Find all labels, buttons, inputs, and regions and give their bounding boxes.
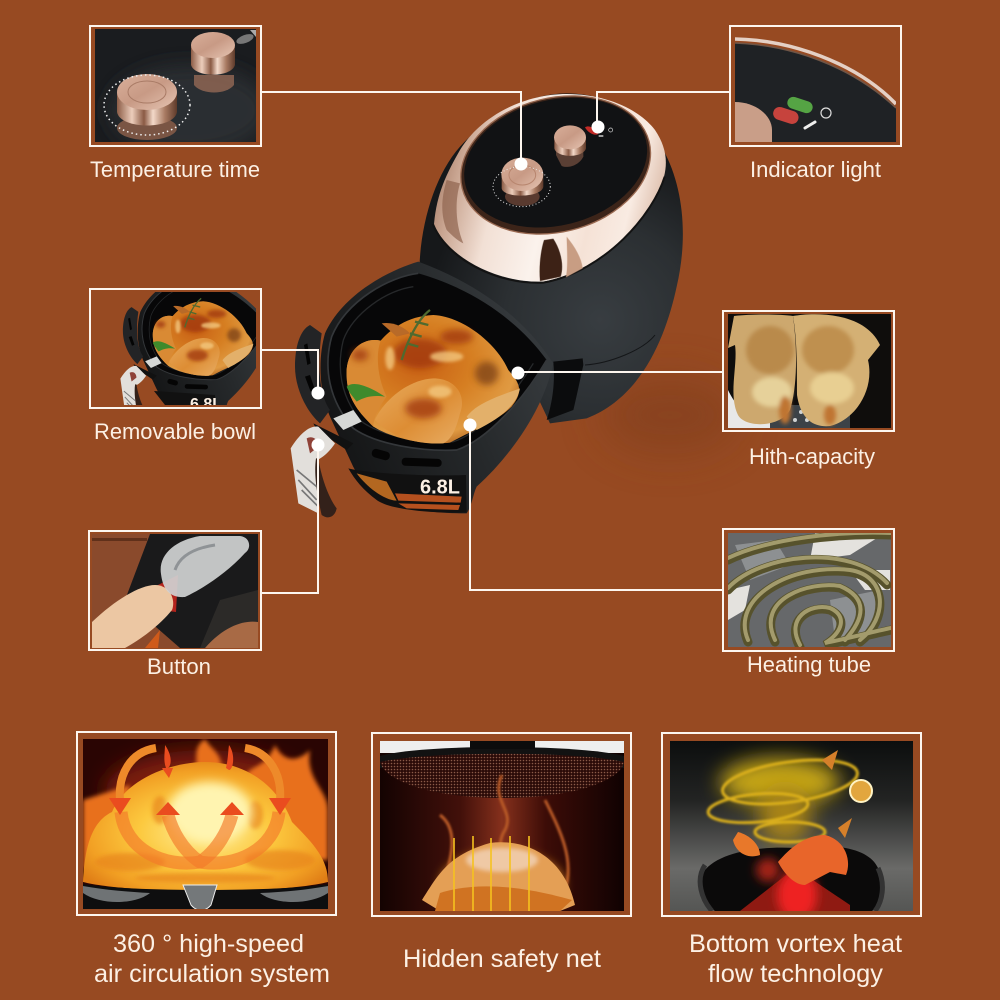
icon: thumb xyxy=(92,585,173,648)
arrows xyxy=(120,748,280,863)
body recess xyxy=(547,358,583,420)
label: 360 air circulation: 360 ° high-speed xyxy=(113,930,304,958)
icon: power symbol xyxy=(821,108,831,118)
label: high capacity: Hith-capacity xyxy=(749,444,875,469)
icon: transparent cover xyxy=(161,536,249,597)
small knob xyxy=(554,125,586,167)
panel: hidden safety net xyxy=(372,733,631,919)
indicator lights xyxy=(585,126,613,137)
label: bottom vortex heat: flow technology xyxy=(708,960,884,988)
lid black top panel xyxy=(446,77,665,253)
icon: glass handle xyxy=(183,885,217,910)
label: temperature time: Temperature time xyxy=(90,157,260,182)
label: removable bowl: Removable bowl xyxy=(94,419,256,444)
fryer body xyxy=(419,93,683,423)
chicken glow xyxy=(83,762,328,891)
connector lines xyxy=(262,92,729,593)
basket label 6.8L xyxy=(348,468,467,513)
chicken xyxy=(422,842,575,911)
panel: button xyxy=(89,531,261,650)
yellow vortex xyxy=(720,758,840,806)
right chicken xyxy=(793,314,880,426)
label: hidden safety net: Hidden safety net xyxy=(403,945,601,973)
basket label 6.8L: 6.8L xyxy=(420,476,460,499)
label: 360 air circulation: air circulation system xyxy=(94,960,330,988)
heating coil xyxy=(728,533,891,647)
mesh net xyxy=(380,754,624,798)
panel: 360 air circulation xyxy=(77,732,336,915)
panel: indicator light xyxy=(730,26,901,146)
panel: high capacity xyxy=(723,311,894,431)
pull-out basket with chicken xyxy=(291,262,553,517)
icon: food ball xyxy=(850,780,872,802)
label: button: Button xyxy=(147,654,211,679)
connector dots xyxy=(312,120,604,452)
lid rose gold ring xyxy=(433,77,666,283)
panel: removable bowl: 6.8L xyxy=(190,396,222,413)
label: bottom vortex heat: Bottom vortex heat xyxy=(689,930,902,958)
panel: heating tube xyxy=(723,529,894,651)
ring reflection xyxy=(442,180,583,281)
basket xyxy=(702,846,881,911)
icon: thermometer xyxy=(805,122,815,128)
flames xyxy=(83,739,328,870)
left chicken xyxy=(728,314,796,424)
large knob xyxy=(493,158,550,207)
main product: air fryer xyxy=(291,77,683,517)
floor shadow xyxy=(600,375,740,455)
icon: knob fragment xyxy=(735,102,772,142)
label: indicator light: Indicator light xyxy=(750,157,881,182)
red glow xyxy=(740,874,850,911)
icon: red light xyxy=(773,107,799,124)
panel: temperature time xyxy=(90,26,270,155)
flames xyxy=(440,775,568,890)
icon: large knob xyxy=(104,74,190,140)
icon: small knob xyxy=(191,32,235,92)
body seam xyxy=(585,335,655,365)
panel: bottom vortex heat xyxy=(662,733,921,921)
icon: green light xyxy=(787,96,813,114)
heat lines xyxy=(454,836,529,911)
label: heating tube: Heating tube xyxy=(747,652,871,677)
flying chicken xyxy=(778,835,848,885)
panel: removable bowl xyxy=(89,288,262,409)
